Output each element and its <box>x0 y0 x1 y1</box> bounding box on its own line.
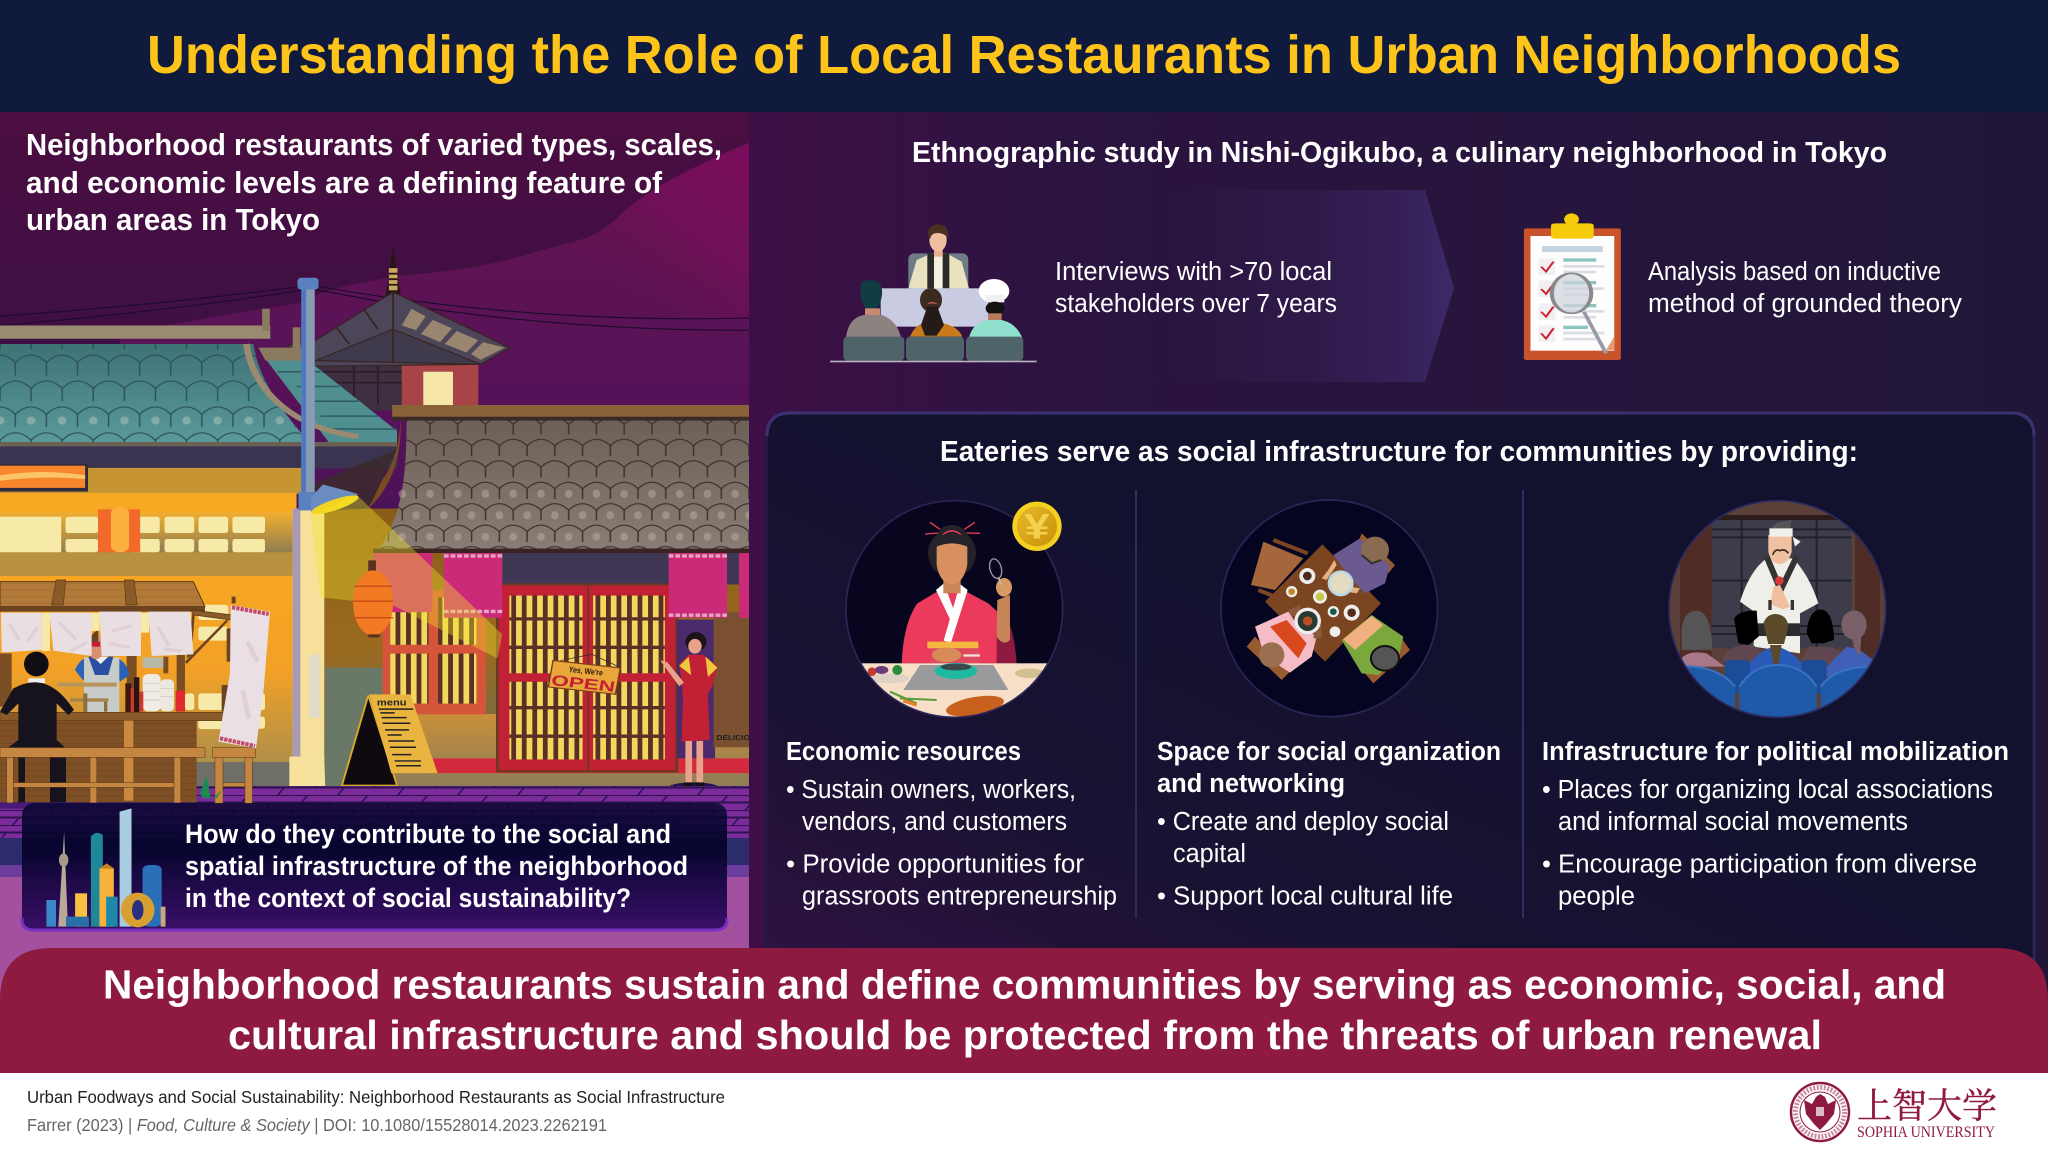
icon: yen coin <box>1012 502 1062 551</box>
text: economic resources: • Provide opportunities for <box>786 850 1085 878</box>
text: social organization: • Create and deploy social <box>1157 808 1449 836</box>
grey tiled restaurant: DELICIO <box>716 733 750 742</box>
text: interviews: stakeholders over 7 years <box>1055 290 1337 318</box>
theatre seats <box>1725 660 1750 693</box>
text: economic resources: • Sustain owners, workers, <box>786 776 1076 804</box>
street and pavement <box>0 786 749 1012</box>
citation: Urban Foodways and Social Sustainability: Neighborhood Restaurants as Social Infrastructure <box>27 1087 725 1107</box>
banner: conclusion: Neighborhood restaurants sustain and define communities by serving as economic, social, and <box>103 962 1946 1008</box>
speaker <box>1740 558 1818 653</box>
open sign: OPEN <box>550 672 616 695</box>
pagoda <box>287 246 509 411</box>
kimono figure <box>902 590 1016 663</box>
bowls and bottles <box>125 657 185 712</box>
shop sign <box>0 464 88 492</box>
dishes <box>1286 568 1360 637</box>
text: economic resources <box>786 738 1117 910</box>
text: political mobilization: • Encourage participation from diverse <box>1542 850 1977 878</box>
red sliding door <box>497 584 677 771</box>
icon: city skyline <box>46 808 165 927</box>
icon: clipboard and magnifier <box>1524 213 1621 360</box>
arrow: method chevron <box>1170 190 1454 382</box>
text: political mobilization: Infrastructure for political mobilization <box>1542 738 2009 766</box>
upper windows <box>0 517 265 552</box>
stall structure <box>0 653 185 712</box>
dark pole and hanging banner <box>222 597 236 712</box>
menu board <box>342 694 438 785</box>
logo: Sophia University: 上智大学 <box>1857 1087 1997 1126</box>
icon: chef with coin <box>840 501 1070 723</box>
waitress <box>660 632 720 794</box>
left window <box>383 590 486 714</box>
diner: purple shirt <box>1322 537 1390 593</box>
text: economic resources: Economic resources <box>786 738 1021 766</box>
footer <box>0 1073 2048 1152</box>
grey tiled restaurant <box>297 405 751 790</box>
diner: pink shirt <box>1255 605 1322 673</box>
menu board: menu <box>377 698 407 708</box>
citation <box>27 1087 725 1135</box>
audience <box>1682 611 1712 650</box>
heading: ethnographic study: Ethnographic study in Nishi-Ogikubo, a culinary neighborhood in Tokyo <box>912 137 1887 169</box>
question text: How do they contribute to the social and <box>185 819 671 849</box>
question text: in the context of social sustainability? <box>185 883 631 913</box>
lamp light beam <box>311 495 502 658</box>
diner: green shirt <box>1342 615 1403 675</box>
open sign: Yes, We're <box>568 664 604 677</box>
food stall <box>0 580 270 809</box>
power lines <box>0 286 750 330</box>
text: analysis: Analysis based on inductive <box>1648 258 1941 286</box>
yellow restaurant building <box>0 446 397 788</box>
question text <box>185 819 688 913</box>
chef <box>57 631 129 712</box>
counter <box>0 721 197 802</box>
question text: spatial infrastructure of the neighborhood <box>185 851 688 881</box>
logo: Sophia University <box>1791 1083 1997 1141</box>
panel: social infrastructure <box>767 413 2034 983</box>
text: social organization <box>1157 738 1501 910</box>
pale windows behind stall <box>42 605 265 729</box>
text: social organization: capital <box>1173 840 1246 868</box>
icon: shared table from above <box>1221 500 1438 717</box>
icon: speaker and audience <box>1667 500 1890 723</box>
logo: Sophia University: SOPHIA UNIVERSITY <box>1857 1124 1995 1141</box>
text: social organization: Space for social organization <box>1157 738 1501 766</box>
text: political mobilization: people <box>1558 882 1635 910</box>
callout: research question <box>22 803 727 930</box>
text: economic resources: grassroots entrepreneurship <box>802 882 1117 910</box>
street lamp <box>289 278 361 787</box>
night sky <box>0 112 749 509</box>
text: social organization: • Support local cultural life <box>1157 882 1453 910</box>
text: analysis: method of grounded theory <box>1648 290 1962 318</box>
text: political mobilization <box>1542 738 2009 910</box>
icon: yen coin: ¥ <box>1024 507 1050 546</box>
lower windows <box>198 605 261 729</box>
title: Understanding the Role of Local Restaurants in Urban Neighborhoods <box>147 25 1901 85</box>
customer <box>0 652 74 802</box>
panel: left heading: Neighborhood restaurants of varied types, scales, <box>26 127 722 162</box>
noren curtains <box>373 553 750 618</box>
header bar <box>0 0 2048 112</box>
plant <box>200 775 222 798</box>
text: interviews <box>1055 258 1337 318</box>
stall roof <box>0 582 205 607</box>
text: social organization: and networking <box>1157 770 1345 798</box>
bench <box>0 748 256 804</box>
icon: interview group <box>830 224 1037 362</box>
panel: left heading: and economic levels are a defining feature of <box>26 165 663 200</box>
counter with food <box>862 663 1048 716</box>
scene drawn in source coordinates <box>0 246 751 794</box>
text: economic resources: vendors, and customers <box>802 808 1067 836</box>
text: political mobilization: and informal social movements <box>1558 808 1908 836</box>
citation: Farrer (2023) | Food, Culture & Society | DOI: 10.1080/15528014.2023.2262191 <box>27 1115 607 1135</box>
teal temple roof <box>0 309 397 447</box>
open sign <box>548 650 622 695</box>
panel: street scene <box>0 112 751 1012</box>
text: political mobilization: • Places for organizing local associations <box>1542 776 1993 804</box>
banner: conclusion: cultural infrastructure and should be protected from the threats of urban renewal <box>228 1012 1822 1058</box>
text: interviews: Interviews with >70 local <box>1055 258 1332 286</box>
paper lantern <box>353 560 393 637</box>
panel heading: Eateries serve as social infrastructure for communities by providing: <box>940 436 1858 468</box>
panel: left heading <box>26 127 722 237</box>
facade wall <box>383 714 750 786</box>
text: analysis <box>1648 258 1962 318</box>
banner: conclusion <box>0 948 2048 1073</box>
background: right side <box>749 112 2048 1012</box>
panel: left heading: urban areas in Tokyo <box>26 202 320 237</box>
hanging cloths <box>1 612 193 656</box>
